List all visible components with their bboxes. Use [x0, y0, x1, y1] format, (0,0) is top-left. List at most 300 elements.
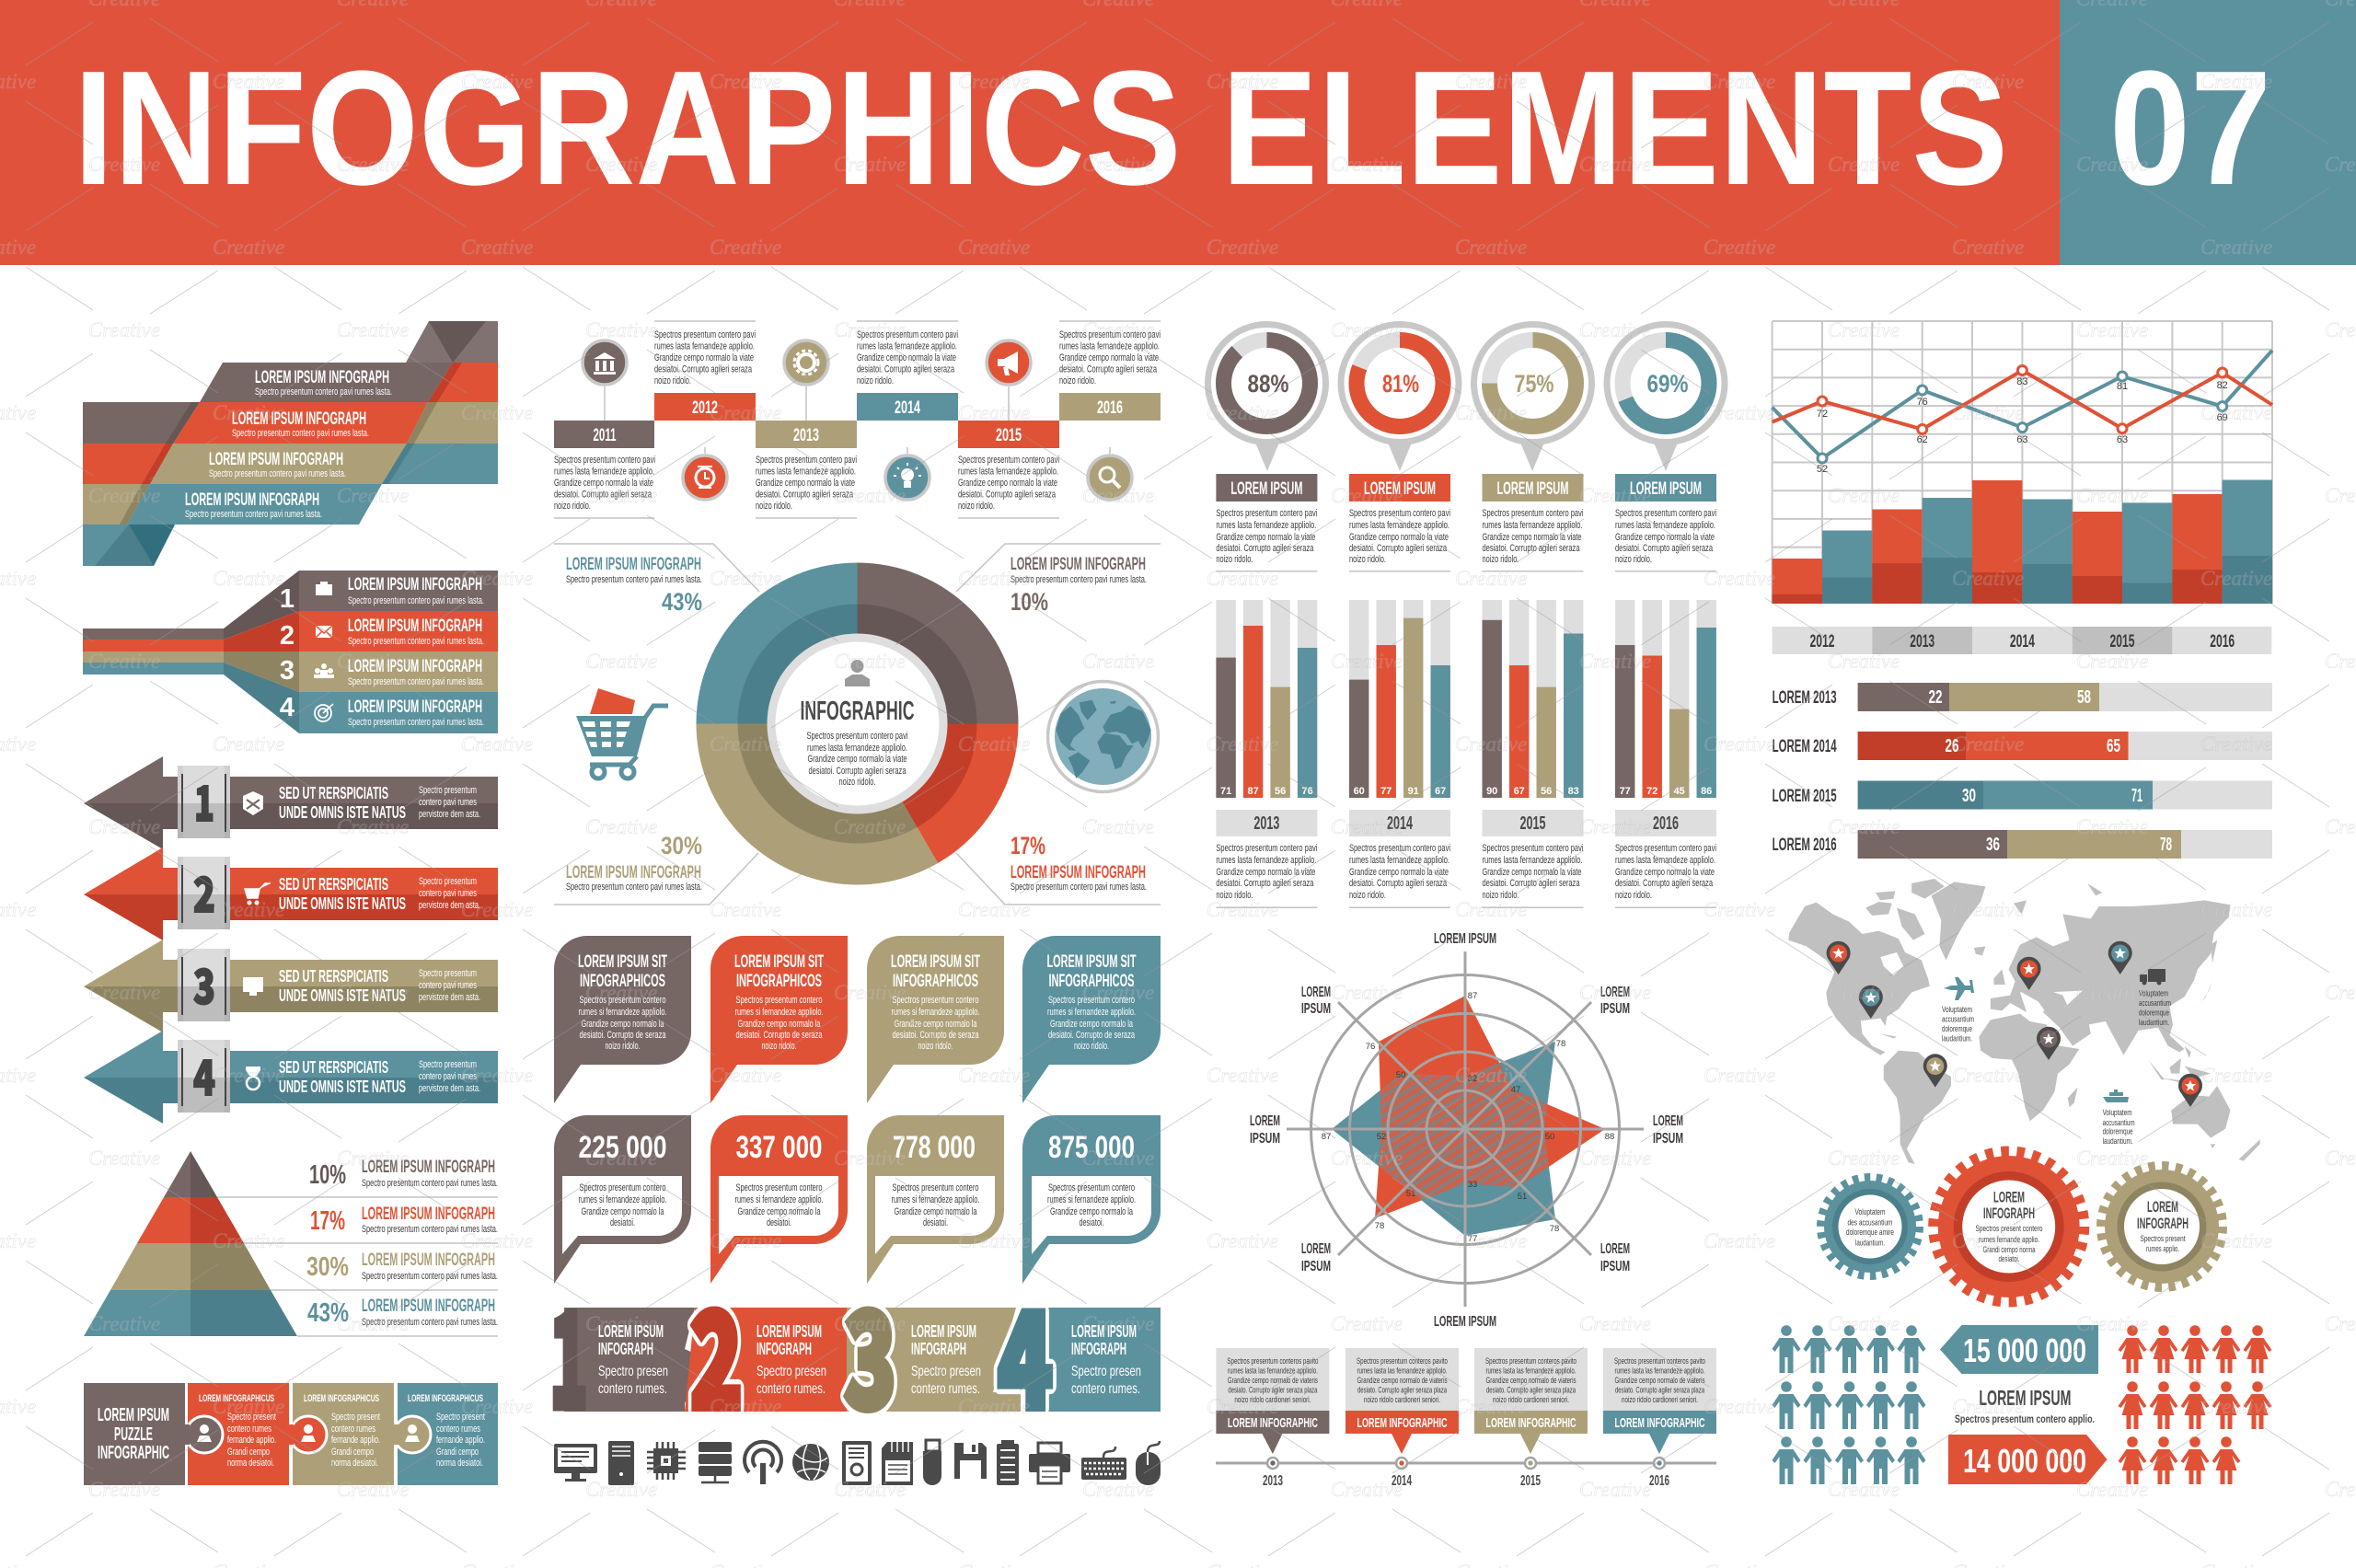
arrow 1	[84, 756, 498, 849]
puzzle text: red	[199, 1393, 276, 1469]
row 2014: 65	[2107, 736, 2120, 756]
timeline text: 2011: Grandize cempo normalo la viate	[554, 478, 653, 489]
icon: battery	[997, 1440, 1019, 1485]
timeline text: 2011: desiatoi. Corrupto agileri seraza	[554, 490, 653, 501]
bubble: brown: desiatoi. Corrupto de seraza	[580, 1030, 666, 1041]
pyramid legend: 10%	[309, 1160, 346, 1190]
banner text 4: Spectro presen	[1071, 1364, 1141, 1379]
row 2013: LOREM 2013	[1773, 688, 1837, 708]
line chart values: 52	[1817, 464, 1828, 475]
timeline text: 2015: noizo ridolo.	[958, 501, 995, 512]
callout 17%	[1011, 832, 1147, 893]
puzzle text: teal: LOREM INFOGRAPHICUS	[408, 1393, 483, 1404]
radar grid	[1287, 951, 1644, 1307]
pyramid legend: 17%	[310, 1206, 345, 1236]
row 2014: 26	[1946, 736, 1958, 756]
year strip: 2012	[1809, 632, 1835, 651]
icon: alarm clock	[683, 455, 727, 500]
pyramid legend: 43%	[307, 1298, 349, 1328]
banner text 2: contero rumes.	[756, 1381, 826, 1397]
number bubble: 778 000: rumes si fernandeze appliolo.	[891, 1194, 979, 1205]
icon: floppy disk	[954, 1443, 987, 1479]
map note: truck: laudantium.	[2139, 1018, 2169, 1028]
pin label column 4: noizo ridolo.	[1615, 554, 1652, 565]
arrow 1: SED UT RERSPICIATIS	[279, 784, 388, 802]
bar group 2013: 56	[1275, 786, 1286, 797]
puzzle text: teal: contero rumes	[436, 1424, 480, 1435]
bar group 2016: Spectros presentum contero pavi	[1615, 843, 1716, 854]
funnel numbers: 4	[280, 693, 294, 722]
year boxes: 2012	[692, 398, 718, 418]
pyramid legend: Spectro presentum contero pavi rumes lasta.	[362, 1224, 498, 1235]
donut centre text	[801, 697, 915, 788]
bar group 2015: Spectros presentum contero pavi	[1482, 843, 1583, 854]
digit 3	[844, 1255, 896, 1447]
icon: mouse	[1136, 1441, 1161, 1485]
number bubble: 337 000: desiatoi.	[767, 1217, 791, 1228]
bubble: teal	[1022, 936, 1161, 1103]
panel: gears	[1821, 1152, 2223, 1301]
gear: red: Grandi cempo norma	[1982, 1245, 2036, 1255]
bar group 2013: Spectros presentum contero pavi	[1216, 843, 1317, 854]
puzzle text: tan	[304, 1393, 380, 1469]
icon: server	[699, 1442, 732, 1482]
radar values: 33	[1468, 1180, 1477, 1190]
puzzle text: tan: contero rumes	[331, 1424, 375, 1435]
radar values: 78	[1556, 1039, 1565, 1049]
issue number: 07	[2109, 37, 2271, 219]
arrow 4: contero pavi rumes	[419, 1071, 477, 1082]
timeline text: 2016: noizo ridolo.	[1059, 375, 1096, 386]
funnel text rows	[348, 575, 484, 728]
number bubble: 778 000: desiatoi.	[923, 1217, 948, 1228]
map note: airplane	[1942, 1005, 1974, 1044]
row 2016	[1773, 830, 2272, 859]
number bubble: 778 000: 778 000	[893, 1130, 976, 1165]
bar group 2016: Grandize cempo normalo la viate	[1615, 867, 1715, 878]
icon: target	[315, 704, 333, 721]
callout 17%: 17%	[1011, 832, 1045, 859]
bubble: tan: Spectros presentum contero	[893, 995, 979, 1006]
year boxes	[554, 393, 1161, 448]
panel: vertical bar charts	[1216, 600, 1716, 908]
pin label column 2: noizo ridolo.	[1349, 554, 1386, 565]
pin label column 2: desiatoi. Corrupto agileri seraza	[1349, 543, 1448, 554]
ribbon text rows: LOREM IPSUM INFOGRAPH	[255, 368, 389, 387]
timeline text: 2013: rumes lasta fernandeze appliolo.	[756, 466, 856, 477]
flag 2016: LOREM INFOGRAPHIC	[1614, 1415, 1705, 1431]
radar values: 77	[1468, 1234, 1477, 1244]
gear: tan: LOREM	[2147, 1198, 2178, 1216]
callout 17%: Spectro presentum contero pavi rumes lasta.	[1011, 882, 1147, 893]
pin label column 2: rumes lasta fernandeze appliolo.	[1349, 520, 1449, 531]
year strip: 2013	[1910, 632, 1934, 651]
banner text 1: Spectro presen	[598, 1364, 668, 1379]
funnel text rows: LOREM IPSUM INFOGRAPH	[348, 698, 482, 717]
pin label column 2	[1349, 474, 1450, 572]
radar values: 50	[1545, 1132, 1554, 1142]
donut centre text: noizo ridolo.	[839, 777, 876, 788]
bar group 2016: 2016	[1653, 813, 1679, 834]
puzzle text: tan: LOREM INFOGRAPHICUS	[304, 1393, 379, 1404]
timeline text: 2012	[654, 329, 756, 386]
puzzle text: red: contero rumes	[227, 1424, 271, 1435]
radar values: 88	[1605, 1132, 1614, 1142]
donut outer ring	[696, 563, 1018, 884]
radar labels: IPSUM	[1250, 1131, 1280, 1147]
number bubble: 875 000: Spectros presentum contero	[1048, 1182, 1135, 1193]
radar values	[1322, 991, 1614, 1244]
row 2015	[1773, 780, 2272, 810]
number bubble: 337 000	[710, 1115, 848, 1284]
banner text 2	[756, 1322, 826, 1397]
year boxes: 2011	[593, 426, 617, 445]
icon: antenna	[745, 1442, 781, 1484]
pin 75%: 75%	[1515, 370, 1553, 398]
radar labels: LOREM	[1301, 985, 1331, 1000]
arrow 2: contero pavi rumes	[419, 888, 477, 899]
radar values: 52	[1377, 1132, 1386, 1142]
timeline text: 2016	[1059, 329, 1161, 386]
radar series	[1332, 996, 1605, 1236]
radar labels: LOREM	[1600, 1241, 1630, 1257]
bubble: brown: rumes si fernandeze appliolo.	[578, 1007, 666, 1018]
arrow 2: pervistore dem asta.	[419, 900, 480, 911]
flag 2014	[1345, 1348, 1459, 1489]
bubble: teal: INFOGRAPHICOS	[1049, 972, 1134, 991]
bar group 2016: 45	[1674, 786, 1685, 797]
arrow 1: 1	[194, 766, 214, 835]
panel: funnel list	[83, 571, 498, 733]
pyramid legend: Spectro presentum contero pavi rumes lasta.	[362, 1178, 498, 1189]
map note: airplane: doloremque	[1942, 1024, 1972, 1034]
flag 2013: Grandize cempo normalo de viateris	[1228, 1376, 1318, 1386]
banner text 4: contero rumes.	[1071, 1381, 1140, 1397]
puzzle text: tan: fernande applio.	[331, 1435, 380, 1446]
banner text 2: INFOGRAPH	[756, 1340, 812, 1358]
pin label column 2: LOREM IPSUM	[1364, 479, 1436, 499]
ribbon text rows	[185, 368, 392, 520]
puzzle text: teal: fernande applio.	[436, 1435, 485, 1446]
row 2013	[1773, 683, 2272, 711]
callout 10%: Spectro presentum contero pavi rumes lasta.	[1011, 574, 1147, 585]
banner text 1: LOREM IPSUM	[598, 1322, 664, 1341]
gear: red: INFOGRAPH	[1983, 1205, 2035, 1222]
flag 2014: rumes lasta las fernandeze appliolo.	[1357, 1366, 1447, 1377]
banner text 3: INFOGRAPH	[911, 1340, 966, 1358]
timeline text: 2013: noizo ridolo.	[756, 501, 792, 512]
bubble: tan: LOREM IPSUM SIT	[891, 952, 980, 972]
arrow 4: pervistore dem asta.	[419, 1083, 480, 1094]
icon: briefcase	[316, 582, 332, 595]
radar values: 87	[1468, 991, 1477, 1001]
icon: memory card	[882, 1442, 913, 1485]
header banner	[0, 0, 2356, 265]
callout 30%: LOREM IPSUM INFOGRAPH	[566, 863, 701, 882]
radar labels	[1250, 931, 1683, 1330]
panel: population comparison	[1773, 1325, 2271, 1484]
bar group 2014: 60	[1354, 786, 1365, 797]
panel: flag timeline	[1216, 1348, 1716, 1489]
pin label column 3: rumes lasta fernandeze appliolo.	[1482, 520, 1583, 531]
panel: pyramid	[84, 1151, 498, 1336]
timeline text: 2011: noizo ridolo.	[554, 501, 591, 512]
bar group 2014: rumes lasta fernandeze appliolo.	[1349, 855, 1449, 866]
icon: hard drive	[842, 1441, 872, 1485]
callout 30%	[566, 832, 702, 893]
year strip: 2014	[2010, 632, 2035, 651]
puzzle text: red: LOREM INFOGRAPHICUS	[199, 1393, 274, 1404]
puzzle title: INFOGRAPHIC	[98, 1443, 169, 1463]
bubble: teal: Grandize cempo normalo la	[1050, 1019, 1134, 1030]
pin label column 4	[1615, 474, 1716, 572]
icon: keyboard	[1081, 1447, 1126, 1480]
radar labels: LOREM	[1301, 1241, 1331, 1257]
radar labels: IPSUM	[1600, 1259, 1630, 1274]
red line series	[1773, 366, 2272, 434]
arrow 3: SED UT RERSPICIATIS	[279, 967, 388, 986]
arrow 4: SED UT RERSPICIATIS	[279, 1058, 388, 1077]
timeline text: 2016: rumes lasta fernandeze appliolo.	[1059, 340, 1160, 352]
flag 2013: noizo ridolo cardioneri seniori.	[1234, 1395, 1311, 1405]
panel: speech bubbles	[554, 936, 1161, 1284]
panel: numbered banners: 1	[549, 1255, 588, 1447]
funnel text rows: LOREM IPSUM INFOGRAPH	[348, 575, 482, 594]
icon: envelope	[316, 626, 332, 638]
flag 2015: noizo ridolo cardioneri seniori.	[1493, 1395, 1569, 1405]
pyramid legend: LOREM IPSUM INFOGRAPH	[362, 1251, 495, 1270]
number bubble: 337 000: 337 000	[736, 1130, 823, 1165]
bar group 2013: desiatoi. Corrupto agileri seraza	[1216, 878, 1314, 889]
digit 4: 4	[998, 1255, 1053, 1447]
banner text 4	[1071, 1322, 1141, 1397]
arrow 3: Spectro presentum	[419, 968, 477, 979]
map note: ship: doloremque	[2103, 1127, 2133, 1137]
gear: red	[1934, 1152, 2084, 1301]
callout 30%: 30%	[661, 832, 702, 859]
pyramid legend: Spectro presentum contero pavi rumes lasta.	[362, 1317, 498, 1328]
donut centre text: Grandize cempo normalo la viate	[808, 754, 907, 765]
year strip: 2016	[2210, 632, 2235, 651]
number bubble: 778 000: Spectros presentum contero	[893, 1182, 979, 1193]
banner text 4: INFOGRAPH	[1071, 1340, 1126, 1358]
line chart values: 62	[1917, 434, 1928, 445]
funnel numbers: 2	[280, 621, 294, 651]
pin 81%	[1341, 324, 1459, 471]
bar group 2016: 77	[1620, 786, 1631, 797]
panel: donut chart	[554, 544, 1161, 905]
funnel text rows: Spectro presentum contero pavi rumes lasta.	[348, 676, 484, 687]
bubble: tan	[867, 936, 1004, 1103]
gear: red: Spectros present contero	[1975, 1224, 2043, 1234]
ribbon text rows: LOREM IPSUM INFOGRAPH	[185, 490, 319, 510]
bubble: brown: noizo ridolo.	[606, 1041, 641, 1052]
banner text 1	[598, 1322, 668, 1397]
year boxes: 2014	[895, 398, 920, 418]
number bubble: 225 000	[554, 1115, 691, 1284]
pin 88%	[1207, 324, 1325, 471]
panel: world map	[1788, 879, 2260, 1164]
callout: men total	[1940, 1325, 2098, 1374]
icon: computer tower	[608, 1441, 634, 1485]
pin 88%: 88%	[1248, 370, 1288, 398]
pin label column 3: desiatoi. Corrupto agileri seraza	[1482, 543, 1580, 554]
map note: truck: doloremque	[2139, 1009, 2169, 1019]
icon: magnifier	[1088, 455, 1132, 500]
puzzle title	[98, 1405, 169, 1463]
men pictograms	[1773, 1325, 1925, 1484]
flag 2015: LOREM INFOGRAPHIC	[1485, 1415, 1576, 1431]
row 2016: 36	[1986, 835, 2000, 855]
bubble: brown	[554, 936, 691, 1103]
bar group 2014: 77	[1380, 786, 1392, 797]
row 2013: 22	[1929, 687, 1942, 708]
funnel numbers: 3	[280, 656, 294, 686]
bar group 2013: 71	[1220, 786, 1231, 797]
gear: tan: INFOGRAPH	[2137, 1215, 2189, 1232]
bubble: red: Grandize cempo normalo la	[738, 1019, 821, 1030]
arrow 4: Spectro presentum	[419, 1059, 477, 1070]
bar group 2014: 91	[1408, 786, 1419, 797]
ribbon text rows: LOREM IPSUM INFOGRAPH	[232, 409, 366, 429]
timeline text: 2015: desiatoi. Corrupto agileri seraza	[958, 490, 1057, 501]
radar labels: LOREM	[1600, 985, 1630, 1000]
bubble: teal: desiatoi. Corrupto de seraza	[1048, 1030, 1136, 1041]
timeline text: 2011: Spectros presentum contero pavi	[554, 455, 655, 466]
pin label column 3: LOREM IPSUM	[1496, 479, 1568, 499]
digit 2	[690, 1255, 743, 1447]
icon: monitor	[554, 1444, 597, 1482]
banner text 3: Spectro presen	[911, 1364, 981, 1379]
bubble: tan: noizo ridolo.	[918, 1041, 953, 1052]
line chart values: 81	[2117, 381, 2128, 392]
flag 2014: 2014	[1392, 1473, 1412, 1489]
timeline text: 2012: Spectros presentum contero pavi	[654, 329, 756, 340]
flag 2016	[1603, 1348, 1716, 1489]
icon: usb stick	[923, 1440, 941, 1485]
panel: numbered banners	[549, 1255, 1161, 1447]
number bubble: 337 000: Grandize cempo normalo la	[738, 1206, 821, 1217]
puzzle text: tan: norma desiatoi.	[331, 1458, 378, 1469]
bar group 2016: desiatoi. Corrupto agileri seraza	[1615, 878, 1714, 889]
pin label column 4: Grandize cempo normalo la viate	[1615, 532, 1715, 543]
timeline text: 2013	[756, 455, 857, 512]
bar group 2013	[1216, 600, 1317, 908]
funnel text rows: Spectro presentum contero pavi rumes lasta.	[348, 636, 484, 647]
map note: truck	[2139, 989, 2171, 1028]
arrow 2	[84, 847, 498, 940]
arrow 1: UNDE OMNIS ISTE NATUS	[279, 803, 406, 822]
number bubble: 225 000: rumes si fernandeze appliolo.	[578, 1194, 666, 1205]
pin 81%: 81%	[1382, 370, 1419, 398]
pin label column 1: Spectros presentum contero pavi	[1216, 508, 1317, 519]
radar values: 47	[1511, 1085, 1520, 1095]
number bubble: 225 000: 225 000	[578, 1130, 666, 1165]
puzzle text: red: fernande applio.	[227, 1435, 276, 1446]
pin label column 3: noizo ridolo.	[1482, 554, 1519, 565]
number bubble: 337 000: rumes si fernandeze appliolo.	[734, 1194, 823, 1205]
pin label column 4: desiatoi. Corrupto agileri seraza	[1615, 543, 1714, 554]
radar labels: IPSUM	[1653, 1131, 1683, 1147]
arrow 1: pervistore dem asta.	[419, 809, 480, 820]
pyramid legend: LOREM IPSUM INFOGRAPH	[362, 1297, 495, 1316]
number bubble: 875 000: Grandize cempo normalo la	[1050, 1206, 1134, 1217]
gear: teal: des accusantium	[1848, 1218, 1893, 1228]
pin label column 1: noizo ridolo.	[1216, 554, 1253, 565]
bar group 2014	[1349, 600, 1450, 908]
bar group 2015: 90	[1486, 786, 1497, 797]
title: INFOGRAPHICS ELEMENTS	[74, 37, 2008, 219]
icon: airplane	[1944, 977, 1974, 1000]
puzzle text: teal	[408, 1393, 485, 1469]
map note: ship	[2103, 1108, 2135, 1147]
digit 3: 3	[844, 1255, 896, 1447]
puzzle text: teal: Spectro present	[436, 1412, 485, 1423]
bar group 2016: noizo ridolo.	[1615, 890, 1652, 901]
centre caption: LOREM IPSUM	[1979, 1386, 2071, 1410]
funnel numbers: 1	[280, 584, 294, 614]
radar labels: LOREM IPSUM	[1434, 931, 1496, 947]
timeline text: 2015: Grandize cempo normalo la viate	[958, 478, 1057, 489]
year boxes: 2016	[1097, 398, 1123, 418]
map pins	[1827, 941, 2202, 1107]
bubble: red: LOREM IPSUM SIT	[734, 952, 824, 972]
bar group 2015: 83	[1568, 786, 1579, 797]
row 2016: 78	[2160, 835, 2172, 855]
bubble: teal: rumes si fernandeze appliolo.	[1047, 1007, 1136, 1018]
arrow 2: Spectro presentum	[419, 876, 477, 887]
gear: tan: Spectros present	[2141, 1234, 2186, 1244]
map note: airplane: Voluptatem	[1942, 1005, 1972, 1015]
bar group 2015: Grandize cempo normalo la viate	[1482, 867, 1582, 878]
icon: ship	[2103, 1090, 2129, 1102]
callout 10%: 10%	[1011, 588, 1048, 616]
bubble: tan: desiatoi. Corrupto de seraza	[893, 1030, 979, 1041]
gear: tan	[2101, 1166, 2223, 1287]
flag 2015: desiato. Corrupto agiler seraza plaza	[1486, 1386, 1576, 1395]
pin label column 3: Spectros presentum contero pavi	[1482, 508, 1583, 519]
callout 17%: LOREM IPSUM INFOGRAPH	[1011, 863, 1146, 882]
bubble: red: noizo ridolo.	[762, 1041, 797, 1052]
bar group 2013: 87	[1247, 786, 1259, 797]
icon: printer	[1029, 1443, 1070, 1483]
map note: truck: Voluptatem	[2139, 989, 2168, 999]
pin 75%	[1474, 324, 1592, 471]
icon: light bulb	[885, 455, 930, 500]
line chart values: 72	[1817, 409, 1828, 420]
flag 2015	[1474, 1348, 1588, 1489]
digit 4: 4	[998, 1255, 1053, 1447]
year strip: 2015	[2109, 632, 2135, 651]
radar labels: IPSUM	[1301, 1001, 1331, 1017]
bar group 2015: desiatoi. Corrupto agileri seraza	[1482, 878, 1580, 889]
bar group 2013: 76	[1301, 786, 1313, 797]
timeline text: 2011: rumes lasta fernandeze appliolo.	[554, 466, 654, 477]
panel: arrow list	[84, 756, 498, 1124]
pyramid legend: 30%	[306, 1252, 349, 1282]
timeline text: 2012: desiatoi. Corrupto agileri seraza	[654, 364, 753, 375]
pin label column 3	[1482, 474, 1583, 572]
pyramid legend: Spectro presentum contero pavi rumes lasta.	[362, 1271, 498, 1282]
radar values: 78	[1375, 1221, 1384, 1231]
panel: radar chart	[1250, 931, 1683, 1330]
number bubble: 875 000: 875 000	[1048, 1130, 1135, 1165]
pyramid legend	[306, 1158, 498, 1328]
funnel text rows: LOREM IPSUM INFOGRAPH	[348, 617, 482, 636]
donut centre text: desiatoi. Corrupto agileri seraza	[808, 766, 907, 777]
pin label column 2: Grandize cempo normalo la viate	[1349, 532, 1449, 543]
pin label column 2: Spectros presentum contero pavi	[1349, 508, 1450, 519]
